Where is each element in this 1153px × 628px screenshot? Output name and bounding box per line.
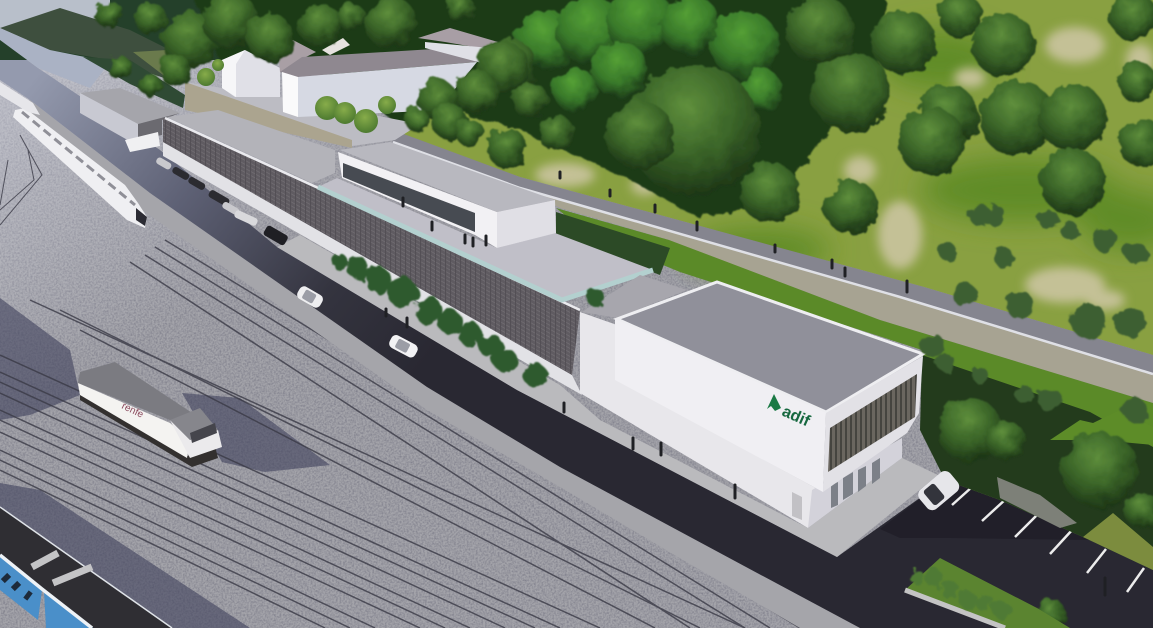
top-left haze background <box>0 0 520 108</box>
logo wordmark: adif <box>779 403 813 430</box>
dark parking shadow area <box>880 480 1090 540</box>
pavilion roof <box>340 142 555 212</box>
train side second car <box>44 592 93 628</box>
locomotive cab top <box>170 408 218 440</box>
hill trees <box>405 0 1153 628</box>
shadows on the gravel <box>0 298 330 628</box>
ground floor wall <box>163 142 582 395</box>
perforated louvre facade <box>163 118 580 375</box>
white high-speed train <box>13 108 147 228</box>
train roof top edge <box>0 507 172 628</box>
upper block front face <box>615 319 826 492</box>
logo tree mark <box>767 394 781 411</box>
train roof units <box>32 553 92 583</box>
upper block end face <box>823 356 923 492</box>
train windows <box>4 576 30 597</box>
pavilion glazing <box>343 163 475 232</box>
white car on road one <box>295 284 325 310</box>
station long wing <box>163 110 653 395</box>
renfe logo: renfe <box>120 401 145 421</box>
roof edge <box>165 118 580 310</box>
locomotive side <box>78 383 190 458</box>
lower end wall <box>808 438 902 528</box>
lower roof <box>582 275 687 318</box>
terrace glass rim <box>318 187 653 300</box>
locomotive windscreen <box>190 423 217 443</box>
road edge strip and fence <box>20 100 860 628</box>
pedestrians <box>386 172 1105 595</box>
dark shrub zone right of building <box>920 355 1153 570</box>
lower wall <box>580 312 823 528</box>
grass strip below wall <box>556 208 1153 570</box>
sidewalk <box>277 235 938 557</box>
parked car at building end <box>915 468 962 513</box>
bright upper trees <box>515 0 782 112</box>
wall service panel <box>792 492 802 520</box>
blue commuter train <box>0 507 172 628</box>
roof terrace <box>318 178 653 302</box>
shrubs on the parking island <box>910 569 1011 619</box>
railway tracks <box>0 135 800 628</box>
hillside <box>395 0 1153 355</box>
white houses on the plaza <box>222 28 498 117</box>
plaza round trees <box>197 59 396 133</box>
pavilion white band <box>338 152 497 248</box>
walkway railing <box>393 142 1153 374</box>
parked cars row <box>155 156 289 246</box>
forest mass on top of hill <box>180 0 885 218</box>
lawn below the tree <box>1083 513 1153 570</box>
service doors <box>831 458 880 508</box>
train side first car <box>0 555 42 620</box>
planting along the facade <box>332 254 605 387</box>
locomotive <box>78 362 222 467</box>
parking bay lines <box>952 487 1144 592</box>
retaining stone wall <box>520 188 1153 403</box>
pavilion end wall <box>497 200 556 248</box>
rocky patches on hillside <box>535 27 1153 310</box>
rock strip beside parking <box>997 477 1077 528</box>
far forest crowns <box>96 0 474 96</box>
parking island <box>905 558 1070 628</box>
locomotive nose <box>170 420 222 458</box>
adif white block <box>580 275 923 528</box>
upper block roof <box>617 282 923 412</box>
right lawn diamond <box>1050 410 1153 445</box>
small hillside bushes <box>920 204 1147 422</box>
white car on road two <box>387 333 420 359</box>
dark ivy hedge behind terrace <box>556 212 670 275</box>
roof parapet <box>617 282 923 412</box>
locomotive roof <box>78 362 218 440</box>
second train far left <box>0 82 40 115</box>
right lawn areas <box>690 30 1153 272</box>
wing roof <box>167 110 335 183</box>
slatted glazing <box>828 374 917 472</box>
train roof <box>0 507 172 628</box>
end building on the left <box>80 88 180 152</box>
train roof edge <box>0 555 92 628</box>
hillside walkway <box>393 130 1153 378</box>
locomotive underframe <box>80 393 218 467</box>
plaza behind station <box>185 82 420 148</box>
